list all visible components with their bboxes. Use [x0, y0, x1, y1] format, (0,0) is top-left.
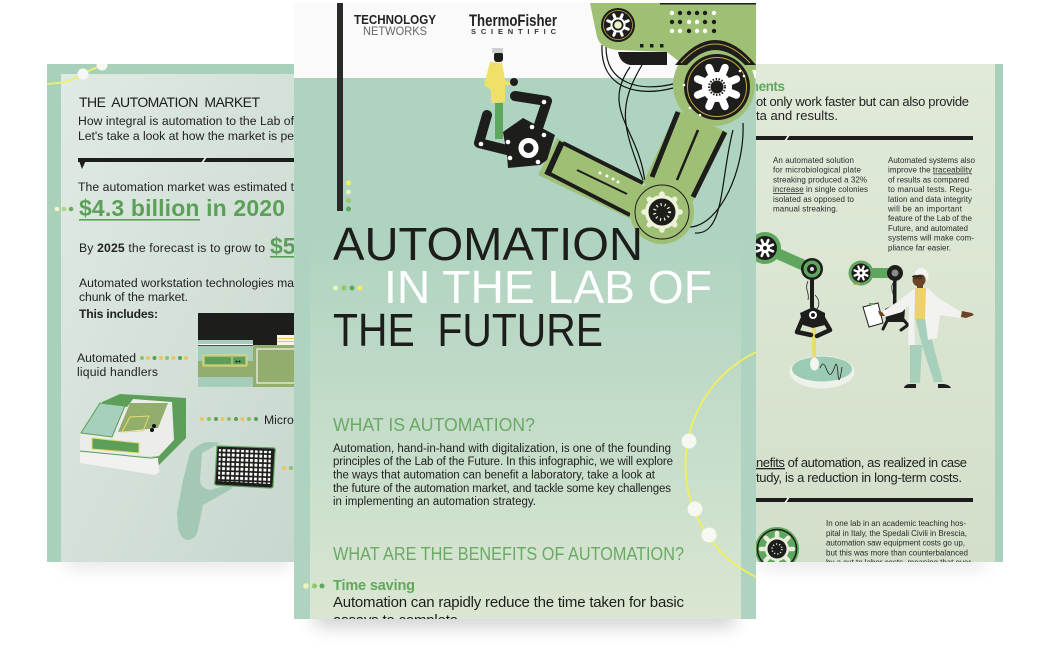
- logo: Thermo Fisher Scientific: [469, 14, 557, 34]
- stat: 4.3 billion in 2020: $4.3 billion in 2020: [79, 195, 285, 221]
- illustration: person standing on claw: [484, 48, 518, 139]
- logo: Thermo Fisher Scientific: ThermoFisher: [469, 12, 557, 30]
- text: traceability column: to manual tests. Regu-: [888, 185, 972, 194]
- large shoulder gear: [673, 40, 756, 126]
- robot claw: [479, 96, 555, 168]
- text: plate streaking column: for microbiological plate: [773, 166, 862, 174]
- text: Spedali Civili case study: but this was more than counterbalanced: [826, 548, 968, 558]
- illustration: robot arm streaking a plate: [749, 232, 854, 388]
- text: market intro: How integral is automation to the Lab of: [78, 114, 295, 128]
- text: cost benefits intro: tudy, is a reduction in long-term costs.: [756, 470, 962, 485]
- text: automation intro paragraph: in implementing an automation strategy.: [333, 496, 536, 508]
- label: automated liquid handlers: liquid handlers: [77, 365, 158, 379]
- text: workstation technologies: chunk of the market.: [79, 290, 188, 304]
- text: time saving description: Automation can rapidly reduce the time taken for basic: [333, 594, 684, 611]
- dots: pointer to microplate: [282, 466, 293, 470]
- label: automated liquid handlers: [77, 351, 188, 379]
- heading: the automation market: THE AUTOMATION MARKET: [79, 94, 260, 110]
- text: 2025 forecast: By 2025 the forecast is to grow to: [79, 241, 265, 255]
- text: Spedali Civili case study: [826, 520, 971, 562]
- title: Automation in the Lab of the Future: THE FUTURE: [333, 304, 603, 356]
- illustration: gloved hand holding plate: [177, 442, 275, 540]
- text: workstation technologies: Automated workstation technologies ma: [79, 276, 294, 290]
- text: plate streaking column: increase in single colonies: [773, 185, 868, 194]
- panel: left page, the automation market: [47, 60, 297, 562]
- text: traceability column: feature of the Lab of the: [888, 214, 973, 223]
- logo: Technology Networks: TECHNOLOGY: [354, 12, 436, 27]
- text: plate streaking column: isolated as opposed to: [773, 195, 855, 204]
- text: automation intro paragraph: [333, 443, 673, 508]
- text: traceability column: systems will make com-: [888, 234, 974, 242]
- illustration: scientist in lab coat: [878, 268, 974, 388]
- text: workstation technologies: [79, 278, 294, 318]
- title: Automation in the Lab of the Future: [333, 218, 712, 356]
- text: market estimate: The automation market was estimated t: [78, 180, 295, 194]
- title: Automation in the Lab of the Future: AUTOMATION: [333, 218, 643, 270]
- text: Spedali Civili case study: In one lab in an academic teaching hos-: [826, 519, 966, 528]
- heading: what are the benefits of automation: WHAT ARE THE BENEFITS OF AUTOMATION?: [333, 544, 684, 564]
- panel: right page, benefits: [747, 64, 1003, 571]
- label: microplate: [200, 415, 294, 424]
- dots: title accent: [333, 286, 362, 290]
- upper arm segment: [643, 110, 727, 203]
- background shadows: [65, 550, 985, 626]
- text: automation intro paragraph: the future of the automation market, and tackle some key challenges: [333, 483, 671, 495]
- label: microplate: Micro: [264, 413, 294, 427]
- text: workstation technologies: This includes:: [79, 307, 158, 321]
- vertical bar with dots: [337, 3, 351, 212]
- illustration: robot arm holding clipboard: [848, 260, 908, 330]
- divider: [756, 497, 973, 503]
- text: Spedali Civili case study: by a cut to labor costs, meaning that over: [826, 558, 971, 567]
- text: market intro: [78, 114, 295, 143]
- text: traceability column: Automated systems also: [888, 156, 976, 165]
- text: Spedali Civili case study: pital in Italy, the Spedali Civili in Brescia,: [826, 529, 967, 538]
- text: plate streaking column: [773, 156, 868, 214]
- panel: center cover page: [294, 3, 756, 629]
- text: traceability column: Future, and automated: [888, 224, 968, 233]
- text: market intro: Let's take a look at how the market is pe: [78, 129, 294, 143]
- icon: gear: [756, 527, 799, 562]
- logo: Technology Networks: NETWORKS: [363, 24, 427, 38]
- text: cost benefits intro: nefits of automation, as realized in case: [756, 455, 967, 470]
- text: automation intro paragraph: Automation, hand-in-hand with digitalization, is one of the founding: [333, 443, 671, 455]
- text: plate streaking column: streaking produced a 32%: [773, 176, 867, 184]
- decorative yellow arc with nodes: [47, 64, 108, 85]
- heading: what is automation: WHAT IS AUTOMATION?: [333, 415, 535, 435]
- text: traceability column: improve the traceability: [888, 166, 972, 174]
- text: automation intro paragraph: principles of the Lab of the Future. In this infographic, we will explore: [333, 456, 673, 468]
- text: plate streaking column: manual streaking.: [773, 204, 838, 214]
- text: time saving description: [333, 594, 684, 629]
- dots: time saving marker: [303, 583, 324, 589]
- text: cost benefits intro: [756, 458, 966, 484]
- elbow gear: [630, 180, 694, 244]
- text: traceability column: [887, 156, 976, 252]
- text: traceability column: will be an important: [887, 204, 963, 214]
- title: Automation in the Lab of the Future: IN THE LAB OF: [384, 261, 712, 313]
- text: traceability column: pliance far easier.: [888, 244, 951, 252]
- illustration: robot arm: [479, 3, 756, 244]
- logo: Technology Networks: [354, 15, 436, 35]
- text: consistency intro: [756, 96, 968, 120]
- decorative yellow arc with nodes: [682, 352, 756, 577]
- text: Spedali Civili case study: automation saw equipment costs go up,: [826, 538, 965, 548]
- divider: [756, 135, 973, 141]
- subheading: time saving: Time saving: [333, 578, 415, 594]
- dots: stat marker: [55, 207, 73, 211]
- text: plate streaking column: An automated solution: [773, 156, 854, 165]
- text: traceability column: of results as compared: [888, 176, 969, 184]
- text: automation intro paragraph: the ways that automation can benefit a laboratory, take a look at: [333, 470, 656, 482]
- divider with pointer: [78, 157, 294, 169]
- text: consistency intro: ot only work faster but can also provide: [756, 94, 969, 109]
- logo: Thermo Fisher Scientific: SCIENTIFIC: [471, 27, 557, 36]
- text: 2025 forecast: $5: [270, 233, 296, 259]
- text: time saving description: assays to complete.: [333, 612, 462, 629]
- lower arm segment: [538, 138, 643, 220]
- subheading: improvements: ments: [747, 79, 785, 94]
- text: consistency intro: ta and results.: [756, 108, 838, 123]
- illustration: workstation close-up: [198, 313, 297, 387]
- label: automated liquid handlers: Automated: [77, 351, 136, 365]
- upper robot body: [590, 3, 756, 70]
- text: traceability column: lation and data integrity: [888, 195, 972, 204]
- illustration: liquid handler machine: [80, 394, 186, 475]
- illustration: robot cables: [602, 45, 743, 233]
- text: 2025 forecast: [80, 236, 294, 258]
